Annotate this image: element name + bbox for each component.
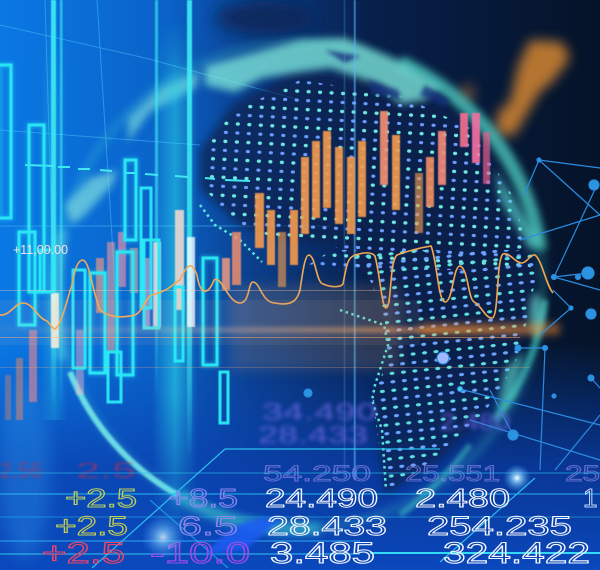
blue flare streak [205, 518, 280, 555]
globe continents, upper arc [65, 38, 543, 420]
ticker row 2: 6.5 [178, 511, 238, 541]
globe ring [56, 42, 545, 529]
faded purple number blobs: 34.490 [262, 399, 377, 426]
faded red numbers: 2.5 [76, 458, 136, 483]
star flare [503, 464, 531, 492]
faded purple number blobs: 2.480 [440, 409, 510, 436]
salmon candlesticks left [5, 210, 241, 420]
grid lines upper left [0, 0, 330, 300]
faded purple number row: 54.250 [263, 461, 371, 486]
faded purple number row [263, 461, 600, 486]
ticker row 1: +2.5 [65, 483, 137, 513]
orange blurred chart smoke [460, 40, 570, 136]
ticker row 3: -10.0 [150, 537, 250, 570]
faded red numbers [0, 458, 136, 483]
horizontal lens flare [0, 285, 560, 370]
Africa coast [200, 205, 388, 490]
ticker row 2: 28.433 [267, 511, 387, 541]
ticker row 1 [65, 483, 597, 513]
faded purple number row: 25 [565, 461, 600, 486]
ticker row 2 [55, 511, 572, 541]
ticker row 2: 254.235 [427, 511, 572, 541]
ticker row 3: 3.485 [270, 537, 375, 570]
ticker row 2: +2.5 [55, 511, 128, 541]
bright vertical lines [51, 0, 356, 480]
cyan hollow candlesticks [0, 65, 228, 423]
ticker row 1: 1 [583, 483, 597, 513]
ticker row 1: 2.480 [415, 483, 510, 513]
vertical light beams [44, 32, 196, 529]
continent gaps [325, 50, 450, 108]
ticker row 3: +2.5 [42, 537, 125, 570]
faded purple number blobs [258, 399, 510, 449]
globe dot map: Africa [190, 70, 550, 500]
dashed horizontal line [25, 165, 250, 181]
ticker row 1: +8.5 [168, 483, 238, 513]
faded red numbers: 2.56 [0, 458, 42, 483]
lower diagonal and horizontal glow lines [0, 449, 600, 568]
orange candlesticks on globe [255, 111, 490, 287]
orange market line [0, 246, 553, 329]
faded purple number row: 25.551 [405, 461, 500, 486]
faded purple number blobs: 28.433 [258, 422, 368, 449]
soft glow bottom left [141, 515, 185, 559]
axis label: +11,00.00 [13, 243, 68, 257]
ticker row 3: 324.422 [443, 537, 590, 570]
ticker row 1: 24.490 [265, 483, 378, 513]
network graph right [304, 158, 600, 470]
ticker row 3 [42, 537, 590, 570]
